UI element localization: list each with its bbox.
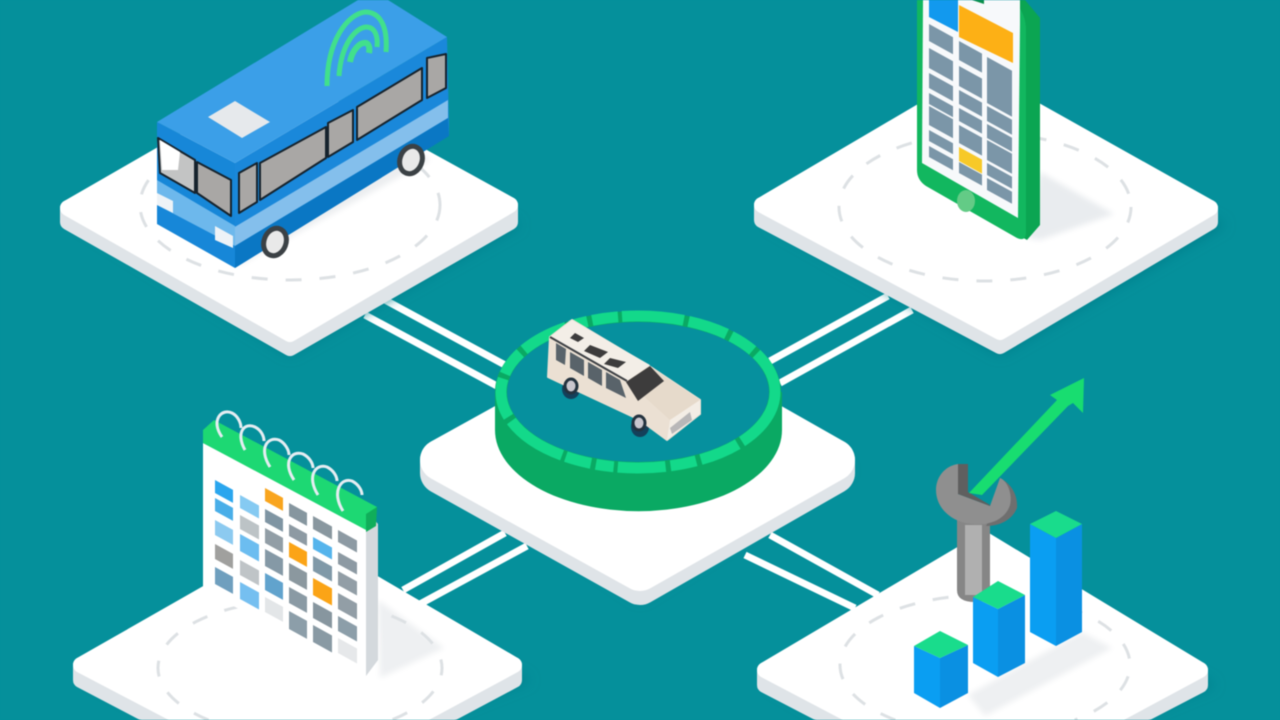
calendar column two	[240, 495, 259, 609]
bar small	[914, 631, 968, 708]
phone side	[1010, 0, 1040, 240]
icon: smartphone	[917, 0, 1040, 240]
calendar rings	[217, 412, 362, 511]
phone front	[917, 0, 1026, 239]
panel: phone platform	[762, 78, 1225, 355]
phone speaker	[972, 0, 984, 4]
icon: central van	[548, 320, 700, 440]
wrench head depth	[986, 478, 1017, 526]
calendar column five	[313, 516, 332, 652]
bus side light stripe	[233, 100, 448, 246]
bus front stripe	[157, 180, 235, 246]
phone cells column one	[929, 24, 953, 170]
arrow: growth	[969, 378, 1084, 495]
calendar page	[203, 443, 366, 676]
bar medium	[973, 581, 1025, 677]
panel: calendar platform	[81, 540, 530, 720]
calendar column three	[265, 488, 283, 622]
calendar column one	[215, 480, 233, 594]
van windows	[556, 333, 664, 401]
panel: bus platform	[68, 82, 520, 355]
central hub ring	[495, 311, 782, 511]
van shadow and wheels	[562, 379, 649, 437]
windscreen highlight	[160, 140, 180, 170]
panel: analytics platform	[765, 540, 1215, 720]
calendar header	[203, 420, 377, 530]
bus roof	[157, 0, 447, 163]
calendar side	[366, 510, 378, 676]
phone screen	[922, 0, 1020, 218]
bus side	[235, 37, 449, 268]
van body	[548, 320, 700, 440]
wrench head	[936, 464, 1011, 524]
icon: wrench	[936, 464, 1017, 602]
panel: central hub platform	[441, 350, 850, 600]
phone orange header	[959, 5, 1013, 63]
phone blue header	[929, 0, 958, 32]
bus lower band	[235, 118, 449, 268]
connector lines	[365, 296, 912, 608]
bus front	[157, 122, 235, 268]
wrench handle	[957, 518, 990, 602]
calendar column four	[289, 503, 307, 639]
icon: wifi arcs	[327, 12, 386, 86]
headlights	[157, 193, 233, 248]
bar tall	[1030, 511, 1082, 646]
icon: calendar	[203, 412, 378, 676]
roof vent	[208, 101, 270, 138]
calendar column six	[338, 530, 357, 663]
bus wheels	[260, 143, 426, 259]
van roof edge	[550, 337, 627, 381]
bus windows	[158, 54, 446, 216]
icon: wifi bus	[157, 0, 449, 268]
phone cells column three	[987, 57, 1012, 204]
chart: blue bars	[914, 511, 1082, 708]
phone cells column two	[959, 41, 982, 186]
wrench jaw wall	[958, 464, 990, 506]
phone home button	[957, 190, 975, 212]
van wheels	[565, 379, 645, 430]
